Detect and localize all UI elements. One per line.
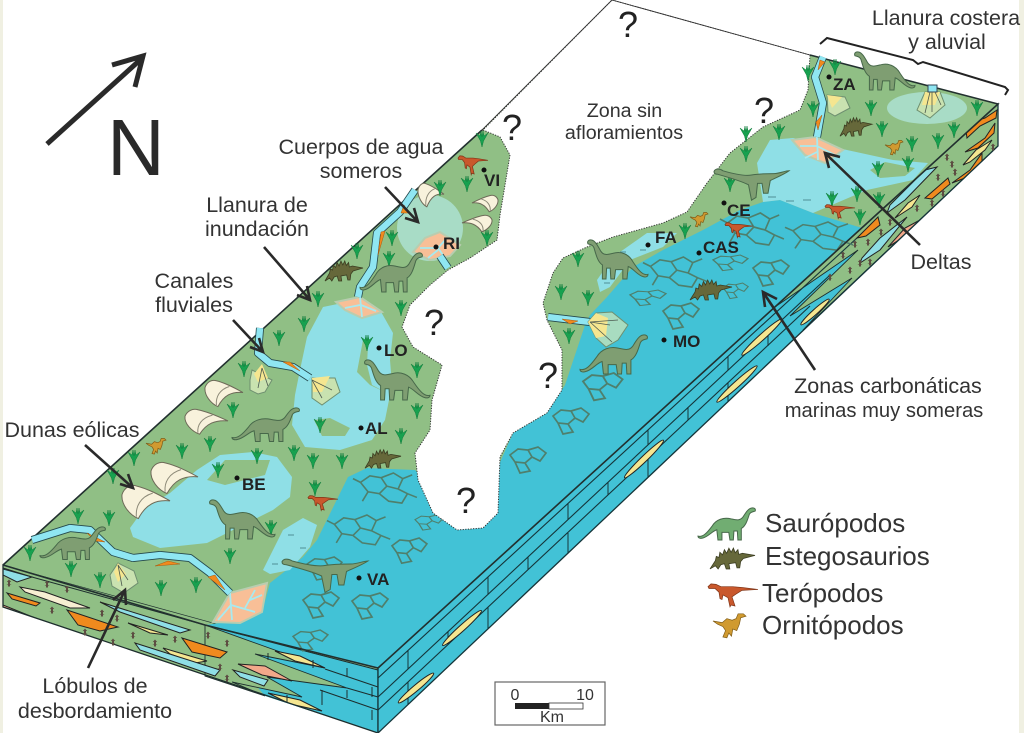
callout: cuerpos de agua [279, 135, 444, 222]
callout: canales fluviales: fluviales [155, 293, 233, 317]
callout: deltas [825, 153, 971, 274]
scale bar: 0 [511, 687, 520, 704]
callout: llanura de inundacion [205, 193, 310, 300]
legend: ornithopods: Ornitópodos [762, 610, 904, 640]
callout: lobulos de desbordamiento: Lóbulos de [42, 674, 148, 698]
callout: llanura costera: y aluvial [908, 30, 986, 54]
marine carbonate zone [205, 200, 862, 668]
locality labels: CAS [703, 238, 739, 257]
locality labels: CE [727, 201, 751, 220]
callout: cuerpos de agua: Cuerpos de agua [279, 135, 444, 159]
front face lenses [3, 568, 325, 711]
callout: zonas carbonaticas [763, 292, 983, 422]
right face [378, 104, 998, 733]
legend: stegosaurs: Estegosaurios [765, 541, 930, 571]
right face plant marks [827, 144, 996, 280]
callout: dunas eolicas [4, 418, 140, 488]
rivers [32, 57, 825, 593]
locality labels: ZA [833, 75, 856, 94]
scale bar: 10 [576, 687, 594, 704]
land islands [207, 162, 915, 485]
question marks: ? [538, 355, 558, 396]
callout: llanura de inundacion: Llanura de [206, 193, 308, 217]
question marks: ? [618, 4, 638, 45]
question marks: ? [456, 480, 476, 521]
legend [698, 508, 930, 640]
locality labels: RI [443, 234, 460, 253]
legend: theropods [708, 578, 883, 608]
callout: lobulos de desbordamiento: desbordamiento [18, 699, 172, 723]
front face [3, 565, 378, 733]
locality labels: LO [384, 341, 408, 360]
locality labels: VA [367, 570, 389, 589]
locality labels: FA [655, 228, 677, 247]
crevasse lobes [110, 85, 945, 593]
callout: zonas carbonaticas: Zonas carbonáticas [794, 374, 982, 398]
callout: llanura costera [820, 6, 1020, 95]
locality labels: VI [484, 171, 500, 190]
callout: deltas: Deltas [911, 250, 971, 274]
callout: dunas eolicas: Dunas eólicas [4, 418, 140, 442]
callout: canales fluviales: Canales [155, 269, 233, 293]
water dashes [272, 197, 811, 564]
ornithopods [146, 140, 903, 454]
callout: zona sin afloramientos: afloramientos [565, 122, 683, 144]
front face plant marks [6, 580, 230, 682]
callout: lobulos de desbordamiento [18, 590, 172, 723]
eolian dunes [122, 183, 498, 519]
desiccation polygons [293, 213, 853, 651]
callout: cuerpos de agua: someros [320, 159, 402, 183]
shallow water bodies [130, 138, 928, 574]
callout: canales fluviales [155, 269, 263, 352]
scale bar: Km [540, 709, 564, 726]
sauropods [40, 52, 915, 592]
question marks: ? [502, 107, 522, 148]
pale ponds [397, 92, 967, 261]
callout: llanura costera: Llanura costera [872, 6, 1020, 30]
unexposed zone [402, 0, 810, 530]
callout: llanura de inundacion: inundación [205, 217, 309, 241]
legend: theropods: Terópodos [762, 578, 883, 608]
question marks [424, 4, 774, 521]
locality labels: AL [365, 419, 388, 438]
grass tufts [24, 59, 983, 596]
north arrow [47, 56, 165, 192]
callout: zona sin afloramientos: Zona sin [587, 100, 662, 122]
question marks: ? [424, 302, 444, 343]
legend: sauropods: Saurópodos [765, 508, 905, 538]
theropods [308, 156, 855, 511]
north letter: N [107, 103, 165, 192]
callout: zonas carbonaticas: marinas muy someras [785, 400, 983, 422]
right face lenses [396, 110, 997, 705]
locality labels: MO [673, 332, 700, 351]
scale bar [495, 682, 605, 726]
stegosaurs [325, 118, 872, 468]
locality labels: BE [242, 475, 266, 494]
locality labels [237, 75, 856, 589]
question marks: ? [754, 90, 774, 131]
deltas [213, 137, 843, 623]
legend: sauropods [698, 508, 905, 540]
